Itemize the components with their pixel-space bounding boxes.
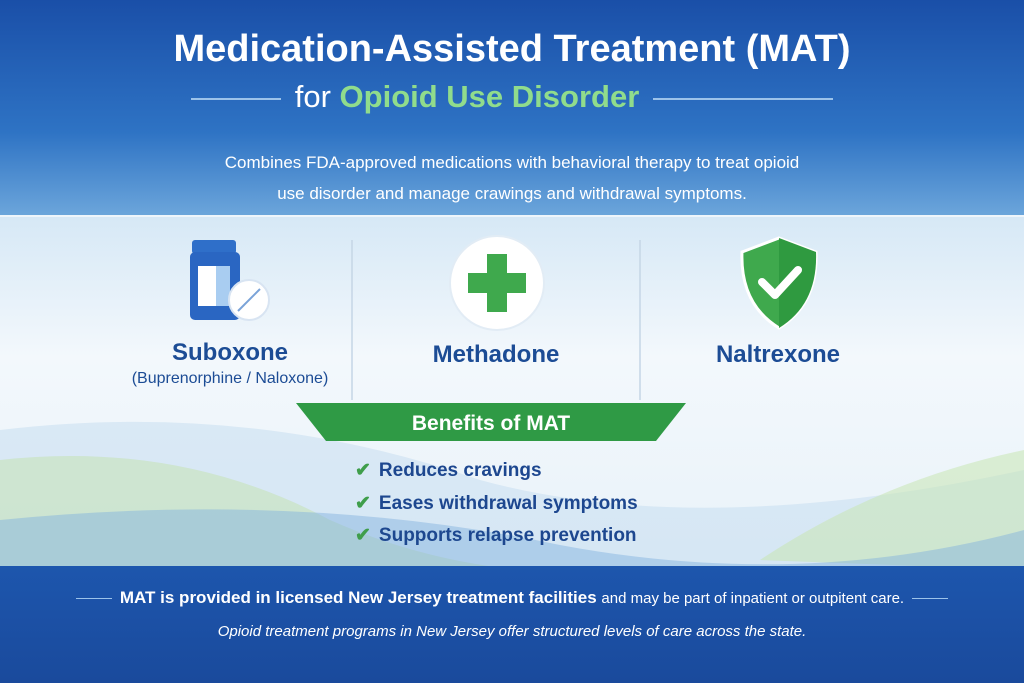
benefits list: ✔ Supports relapse prevention bbox=[355, 525, 637, 546]
description bbox=[225, 153, 799, 203]
label: Naltrexone: Naltrexone bbox=[716, 341, 840, 368]
label: Suboxone bbox=[132, 339, 328, 387]
footer text: MAT is provided in licensed New Jersey treatment facilities and may be part of inpatient or outpitent care. bbox=[120, 588, 904, 607]
label: Suboxone: (Buprenorphine / Naloxone) bbox=[132, 370, 328, 387]
benefits list bbox=[355, 460, 638, 546]
benefits list: ✔ Reduces cravings bbox=[355, 460, 542, 481]
icon: medical cross bbox=[451, 237, 543, 331]
icon: shield check bbox=[740, 236, 818, 330]
description: Combines FDA-approved medications with behavioral therapy to treat opioid bbox=[225, 153, 799, 172]
title: Medication-Assisted Treatment (MAT) bbox=[173, 28, 851, 70]
benefits list: ✔ Eases withdrawal symptoms bbox=[355, 492, 638, 514]
footer subtext: Opioid treatment programs in New Jersey offer structured levels of care across the state. bbox=[218, 623, 806, 640]
description: use disorder and manage crawings and withdrawal symptoms. bbox=[277, 184, 747, 203]
banner: Benefits of MAT: Benefits of MAT bbox=[412, 412, 570, 435]
banner: Benefits of MAT bbox=[296, 403, 686, 441]
label: Methadone: Methadone bbox=[433, 341, 559, 368]
icon: pill bottle bbox=[190, 240, 270, 321]
subtitle: for Opioid Use Disorder bbox=[295, 79, 639, 114]
label: Suboxone: Suboxone bbox=[172, 339, 288, 366]
